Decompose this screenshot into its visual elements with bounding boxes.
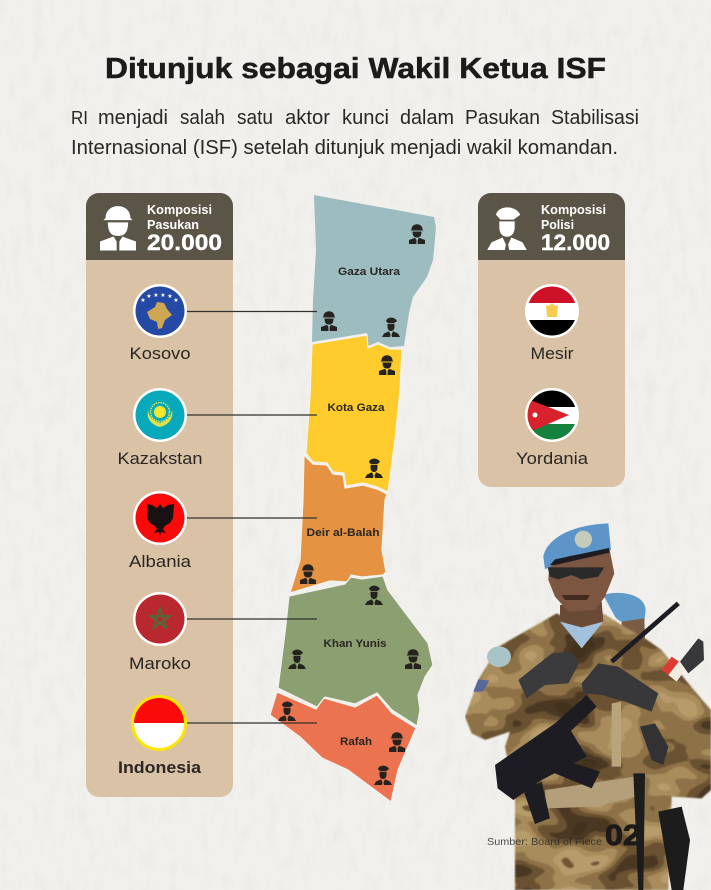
title: Ditunjuk sebagai Wakil Ketua ISF (105, 53, 606, 85)
panel header: pasukan (86, 193, 233, 260)
intro paragraph: kunci (342, 107, 389, 129)
country: Kosovo: ★ (146, 293, 152, 300)
label: komposisi polisi: Polisi (541, 218, 574, 232)
label: komposisi polisi (541, 203, 610, 255)
map of Gaza (270, 195, 436, 802)
label: komposisi pasukan: 20.000 (147, 230, 222, 255)
country: Maroko (129, 592, 191, 673)
country: Kazakhstan (118, 388, 202, 468)
intro paragraph: aktor (285, 107, 330, 129)
label: komposisi pasukan: Pasukan (147, 218, 199, 232)
region: Kota Gaza (306, 335, 402, 492)
country: Albania (129, 490, 192, 571)
country: Kosovo: ★ (173, 297, 179, 304)
country: Indonesia (118, 695, 202, 777)
intro paragraph: Internasional (ISF) setelah ditunjuk menjadi wakil komandan. (71, 137, 618, 159)
icon: police officer (487, 207, 527, 250)
region: Khan Yunis (278, 576, 433, 726)
label: komposisi polisi: Komposisi (541, 203, 606, 217)
country: Yordania: Yordania (516, 449, 589, 468)
photo: UN peacekeeper soldier (465, 523, 711, 890)
region: Deir al-Balah: Deir al-Balah (306, 527, 380, 539)
intro paragraph (71, 107, 639, 159)
intro paragraph: dalam (400, 107, 454, 129)
country: Kosovo: ★ (153, 292, 159, 299)
country: Kosovo: Kosovo (130, 344, 190, 363)
intro paragraph: menjadi (98, 107, 168, 129)
region: Kota Gaza: Kota Gaza (328, 402, 385, 414)
country: Kosovo: ★ (167, 293, 173, 300)
country: Kazakhstan: Kazakstan (118, 449, 202, 468)
country: Yordania (516, 388, 589, 468)
intro paragraph: Stabilisasi (551, 107, 639, 129)
country: Kosovo: ★ (140, 297, 146, 304)
country: Maroko: Maroko (129, 654, 191, 673)
page number: 02 (605, 820, 641, 852)
icon: soldier with helmet (100, 206, 136, 250)
region: Deir al-Balah (290, 455, 387, 593)
panel: komposisi pasukan (86, 193, 233, 797)
panel header: polisi (478, 193, 625, 260)
region: Rafah (270, 692, 416, 802)
label: komposisi polisi: 12.000 (541, 230, 610, 255)
intro paragraph: Pasukan (465, 107, 540, 129)
intro paragraph: satu (237, 107, 273, 129)
connector lines (187, 312, 317, 723)
source note: Sumber: Board of Piece (487, 836, 602, 848)
label: komposisi pasukan: Komposisi (147, 203, 212, 217)
country: Kosovo (130, 284, 190, 363)
country: Albania: Albania (129, 552, 192, 571)
intro paragraph: RI (71, 108, 88, 128)
country: Indonesia: Indonesia (118, 758, 202, 777)
panel: komposisi polisi (478, 193, 625, 487)
region: Rafah: Rafah (340, 736, 372, 748)
intro paragraph: salah (180, 107, 225, 129)
region: Gaza Utara (312, 195, 436, 347)
country: Mesir: Mesir (530, 344, 574, 363)
region: Gaza Utara: Gaza Utara (338, 266, 401, 278)
country: Kosovo: ★ (160, 292, 166, 299)
label: komposisi pasukan (147, 203, 222, 255)
region: Khan Yunis: Khan Yunis (324, 638, 386, 650)
personnel icons (278, 224, 425, 785)
country: Mesir (525, 284, 579, 363)
